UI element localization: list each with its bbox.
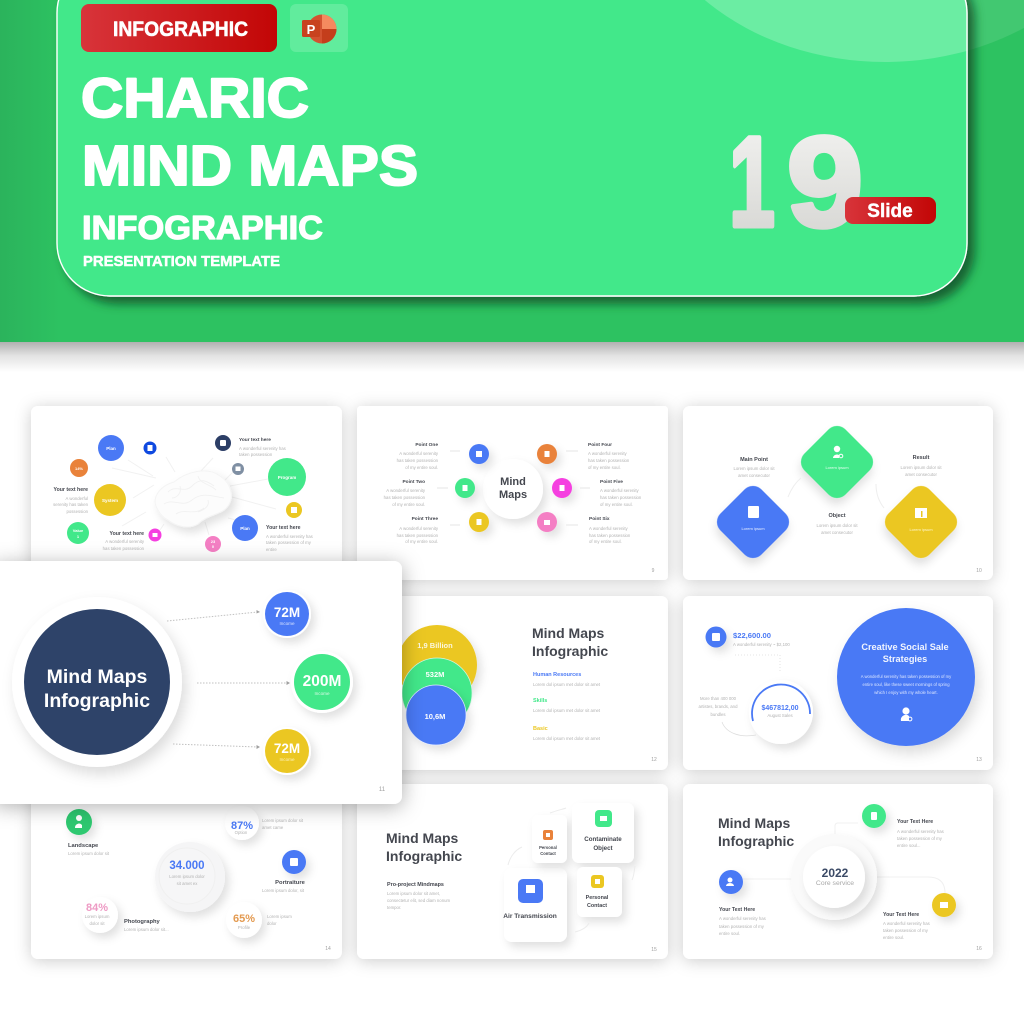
point labels: A wonderful serenity xyxy=(588,451,628,456)
red badge: slide: Slide xyxy=(867,201,913,222)
value: 72M blue: 72M xyxy=(274,605,300,620)
title: charic mind maps: CHARIC xyxy=(81,66,309,129)
center circle xyxy=(483,459,543,519)
stat: 65%: 65% xyxy=(233,913,255,925)
panel: slide 13 social sale xyxy=(683,596,993,770)
text block: tempor. xyxy=(387,905,401,910)
portraiture item: Lorem ipsum dolor, sit xyxy=(262,888,305,893)
heading: Mind Maps xyxy=(386,830,459,846)
connector lines xyxy=(743,823,945,893)
point labels xyxy=(384,442,655,574)
landscape item: Landscape xyxy=(68,843,99,849)
stacked circles chart: 10,6M xyxy=(425,712,445,721)
arrows xyxy=(437,451,590,525)
node labels: A wonderful serenity has xyxy=(266,534,313,539)
ring gauge: $467812,00 xyxy=(762,705,799,712)
landscape item: Lorem ipsum dolor sit xyxy=(68,851,110,856)
red badge: infographic xyxy=(81,4,277,52)
title: charic mind maps: MIND MAPS xyxy=(82,134,418,198)
node labels: Your text here xyxy=(110,531,144,537)
card: air transmission: Air Transmission xyxy=(503,913,557,920)
diamond: result: Lorem ipsum xyxy=(909,527,933,532)
point labels: of my entire soul. xyxy=(392,502,425,507)
heading: Infographic xyxy=(532,643,608,659)
card: personal contact small: Personal xyxy=(539,845,557,850)
point labels: has taken possession xyxy=(384,495,426,500)
card: personal contact: Contact xyxy=(587,903,607,909)
stat: 87%: Lorem ipsum dolor sit xyxy=(262,818,304,823)
diamond: object xyxy=(796,421,878,503)
card: contaminate object: Object xyxy=(593,845,613,852)
labels: amet consecutor xyxy=(738,473,770,478)
center circle: 2022 xyxy=(822,866,849,880)
icon: powerpoint: P xyxy=(307,22,316,37)
diamond: result xyxy=(880,481,962,563)
panel: slide 14 statistics xyxy=(31,784,342,959)
node: top xyxy=(862,804,944,848)
diamond: main point: Lorem ipsum xyxy=(741,526,765,531)
node labels: 0 xyxy=(212,544,215,549)
node: top: taken possession of my xyxy=(897,836,943,841)
card: contaminate object xyxy=(572,803,634,863)
portraiture item: Portraiture xyxy=(275,880,306,886)
node: left: A wonderful serenity has xyxy=(719,916,766,921)
text block: Pro-project Mindmaps xyxy=(387,882,444,888)
slide count: 19: 9 xyxy=(787,111,863,254)
labels: Lorem ipsum dolor sit xyxy=(733,466,775,471)
node: left xyxy=(719,870,766,936)
node labels: taken possession of my xyxy=(266,540,312,545)
center circle: Mind xyxy=(500,476,526,488)
stat: 87%: Option xyxy=(235,830,248,835)
diamond: object: Lorem ipsum xyxy=(825,465,849,470)
side note: bundles xyxy=(710,712,726,717)
point labels: 9 xyxy=(652,568,655,574)
point labels: of my entire soul. xyxy=(588,465,621,470)
subtitle: presentation template: PRESENTATION TEMPLATE xyxy=(83,253,280,270)
stat: 84%: Lorem ipsum xyxy=(85,914,110,919)
page number: 15 xyxy=(651,947,657,953)
node labels: serenity has taken xyxy=(53,502,89,507)
stacked circles chart: 532M xyxy=(426,670,444,679)
node labels: System xyxy=(102,498,118,503)
stat: 34.000: sit amet ex xyxy=(177,881,198,886)
text block: Lorem ipsum dolor sit amet, xyxy=(387,891,440,896)
point labels: has taken possession xyxy=(600,495,642,500)
page number: 16 xyxy=(976,946,982,952)
heading: Infographic xyxy=(386,848,462,864)
node labels: 1 xyxy=(77,534,80,539)
point labels: A wonderful serenity xyxy=(399,451,439,456)
node labels xyxy=(53,437,313,552)
page number: 14 xyxy=(325,946,331,952)
labels: Lorem ipsum dolor sit xyxy=(816,523,858,528)
labels: Lorem ipsum dolor sit xyxy=(900,465,942,470)
big blue circle: which I enjoy with my whole heart. xyxy=(874,690,938,695)
card: personal contact small: Contact xyxy=(540,851,556,856)
panel: slide 12 stacked circles xyxy=(357,596,668,770)
point labels: A wonderful serenity xyxy=(386,488,426,493)
legend list: Basic xyxy=(533,726,548,732)
stat: 65% xyxy=(226,902,292,938)
legend list: 12 xyxy=(651,757,657,763)
labels xyxy=(733,455,982,574)
center circle: Core service xyxy=(816,880,854,887)
node labels: Your text here xyxy=(266,525,301,531)
point labels: Point Three xyxy=(412,516,438,522)
brain illustration xyxy=(155,471,231,527)
stat: 65%: Lorem ipsum xyxy=(267,914,292,919)
stat: 87%: amet came xyxy=(262,825,284,830)
node labels: possession xyxy=(66,509,89,514)
heading: Mind Maps xyxy=(532,625,605,641)
node labels: A wonderful xyxy=(66,496,88,501)
labels: amet consecutor xyxy=(905,472,937,477)
point labels: of my entire soul. xyxy=(405,465,438,470)
side note xyxy=(699,696,982,763)
panel: slide 9 mind maps xyxy=(357,406,668,580)
ring gauge: August Sales xyxy=(767,713,793,718)
point labels: A wonderful serenity xyxy=(589,526,629,531)
value: 72M yellow xyxy=(263,727,311,775)
big blue circle: A wonderful serenity has taken possession of my xyxy=(861,674,952,679)
point labels: Point One xyxy=(415,442,438,448)
center circle xyxy=(791,834,877,920)
stat: 84%: dolor sit xyxy=(89,921,105,926)
stacked circles chart xyxy=(397,625,477,745)
text block xyxy=(387,882,450,910)
icon and value: $22,600.00 xyxy=(733,631,771,640)
slide count: 19 xyxy=(729,111,863,254)
point labels: of my entire soul. xyxy=(405,539,438,544)
node labels: Plan xyxy=(240,526,250,531)
arrows xyxy=(788,478,884,508)
node: left: entire soul. xyxy=(719,931,740,936)
side note: More than 400 000 xyxy=(700,696,737,701)
labels: Main Point xyxy=(740,457,768,463)
value: 72M yellow: 72M xyxy=(274,741,300,756)
value: 72M blue xyxy=(263,590,311,638)
page number: 11 xyxy=(379,787,386,793)
card: personal contact small xyxy=(532,815,567,863)
heading xyxy=(386,830,462,864)
connector lines xyxy=(112,457,276,535)
node labels: has taken possession xyxy=(103,546,145,551)
point labels: has taken possession xyxy=(588,458,630,463)
stat: 34.000: Lorem ipsum dolor xyxy=(169,874,205,879)
node: top: A wonderful serenity has xyxy=(897,829,944,834)
point labels: has taken possession xyxy=(397,533,439,538)
node labels: entire xyxy=(266,547,277,552)
stacked circles chart: 1,9 Billion xyxy=(417,641,453,650)
node circles xyxy=(67,435,306,552)
portraiture item xyxy=(262,850,306,893)
hero green banner xyxy=(0,0,1024,372)
legend list: Lorem dol ipsum met dolor sit amet xyxy=(533,708,601,713)
legend list: Human Resources xyxy=(533,672,581,678)
ring gauge xyxy=(749,680,813,744)
stat: 34.000 xyxy=(155,842,225,912)
point labels: has taken possession xyxy=(397,458,439,463)
center circle: Maps xyxy=(499,489,527,501)
big blue circle: Creative Social Sale xyxy=(861,642,949,652)
panel: slide 9 brain map xyxy=(31,406,342,580)
legend list: Skills xyxy=(533,698,547,704)
point labels: of my entire soul. xyxy=(600,502,633,507)
node: right: A wonderful serenity has xyxy=(883,921,930,926)
legend list: Lorem dol ipsum met dolor sit amet xyxy=(533,682,601,687)
node: left: taken possession of my xyxy=(719,924,765,929)
node icons xyxy=(462,451,564,525)
labels: amet consecutor xyxy=(821,530,853,535)
landscape item xyxy=(66,809,110,856)
value: 72M blue: Income xyxy=(279,621,295,626)
point labels: Point Two xyxy=(402,479,425,485)
card: contaminate object: Contaminate xyxy=(584,836,622,843)
stat: 84%: Photography xyxy=(124,919,161,925)
big blue circle xyxy=(837,608,975,746)
panel: slide 16 core service xyxy=(683,784,993,959)
subtitle: infographic: INFOGRAPHIC xyxy=(82,209,323,246)
card: personal contact xyxy=(577,867,622,917)
stat: 84% xyxy=(82,897,169,933)
node: right: taken possession of my xyxy=(883,928,929,933)
heading: Infographic xyxy=(718,833,794,849)
central navy circle: Mind Maps xyxy=(47,666,148,688)
stat: 84%: Lorem ipsum dolor sit... xyxy=(124,927,169,932)
legend list: Lorem dol ipsum met dolor sit amet xyxy=(533,736,601,741)
panel: slide 10 diamonds xyxy=(683,406,993,580)
hero card xyxy=(57,0,1024,296)
point labels: A wonderful serenity xyxy=(399,526,439,531)
dotted arrows xyxy=(167,612,288,747)
node labels: A wonderful serenity xyxy=(105,539,145,544)
node: right: Your Text Here xyxy=(883,912,919,918)
node labels: Your text here xyxy=(54,487,88,493)
node: top: Your Text Here xyxy=(897,819,933,825)
title: charic mind maps xyxy=(81,66,418,198)
labels: 10 xyxy=(976,568,982,574)
card: air transmission xyxy=(503,868,567,942)
node labels: 14% xyxy=(75,466,83,471)
central navy circle xyxy=(12,597,182,767)
node labels: 23 xyxy=(211,539,216,544)
node: right xyxy=(883,893,956,940)
labels: Result xyxy=(913,455,930,461)
value: 200M green xyxy=(291,651,353,713)
labels: Object xyxy=(828,513,846,519)
heading xyxy=(532,625,608,659)
stat: 34.000: 34.000 xyxy=(169,860,205,872)
value: 200M green: 200M xyxy=(303,673,341,690)
point labels: Point Four xyxy=(588,442,612,448)
node labels: A wonderful serenity has xyxy=(239,446,286,451)
panel: featured slide 11 xyxy=(0,561,402,804)
point labels: Point Six xyxy=(589,516,610,522)
node: top: entire soul... xyxy=(897,843,920,848)
value: 200M green: Income xyxy=(314,691,330,696)
red badge: slide xyxy=(845,197,936,224)
stat: 84%: 84% xyxy=(86,902,108,914)
heading xyxy=(718,815,794,849)
slide count: 19: 1 xyxy=(729,111,775,254)
node circles xyxy=(455,444,572,532)
node: right: entire soul. xyxy=(883,935,904,940)
side note: 13 xyxy=(976,757,982,763)
card: personal contact: Personal xyxy=(586,895,609,901)
big blue circle: entire soul, like these sweet mornings of spring xyxy=(862,682,950,687)
dotted connector xyxy=(735,655,780,671)
red badge: infographic: INFOGRAPHIC xyxy=(113,18,248,41)
legend list xyxy=(533,672,657,763)
central navy circle: Infographic xyxy=(44,690,150,712)
point labels: has taken possession xyxy=(589,533,631,538)
icon and value: A wonderful serenity ~ $2,100 xyxy=(733,642,790,647)
diamond: main point xyxy=(712,481,794,563)
big blue circle: Strategies xyxy=(883,654,927,664)
node labels: taken possession xyxy=(239,452,273,457)
stat: 87%: 87% xyxy=(231,820,253,832)
point labels: A wonderful serenity xyxy=(600,488,640,493)
point labels: of my entire soul. xyxy=(589,539,622,544)
stat: 65%: dolor xyxy=(267,921,277,926)
node labels: Value xyxy=(73,528,84,533)
node labels: Plan xyxy=(106,446,116,451)
point labels: Point Five xyxy=(600,479,623,485)
side note: artistes, brands, and xyxy=(699,704,738,709)
node labels: Your text here xyxy=(239,437,271,443)
node: left: Your Text Here xyxy=(719,907,755,913)
stat: 65%: Profile xyxy=(238,925,251,930)
arrows xyxy=(508,808,635,932)
value: 72M yellow: Income xyxy=(279,757,295,762)
icon: powerpoint xyxy=(290,4,348,52)
icon and value xyxy=(706,626,790,648)
panel: slide 15 transmission xyxy=(357,784,668,959)
text block: consectetur elit, sed diam nonum xyxy=(387,898,450,903)
heading: Mind Maps xyxy=(718,815,791,831)
stat: 87% xyxy=(225,806,304,840)
node labels: Program xyxy=(278,475,296,480)
